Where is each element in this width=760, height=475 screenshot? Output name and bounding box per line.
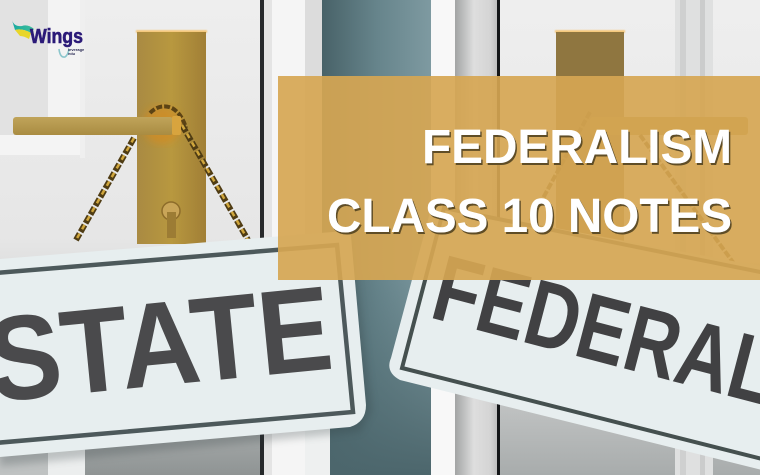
left door handle with chain — [13, 30, 248, 244]
title overlay panel — [278, 76, 760, 280]
title: CLASS 10 NOTES — [327, 190, 732, 243]
sign: STATE — [0, 231, 372, 466]
logo: Wings: Wings — [30, 26, 83, 48]
sign: FEDERAL — [389, 205, 760, 472]
right door handle with chain — [530, 30, 748, 265]
logo: Wings: leverage — [68, 47, 85, 52]
logo: Wings: edu — [68, 51, 76, 56]
logo: Wings — [12, 20, 85, 57]
title — [327, 121, 732, 243]
title: FEDERALISM — [422, 121, 732, 174]
